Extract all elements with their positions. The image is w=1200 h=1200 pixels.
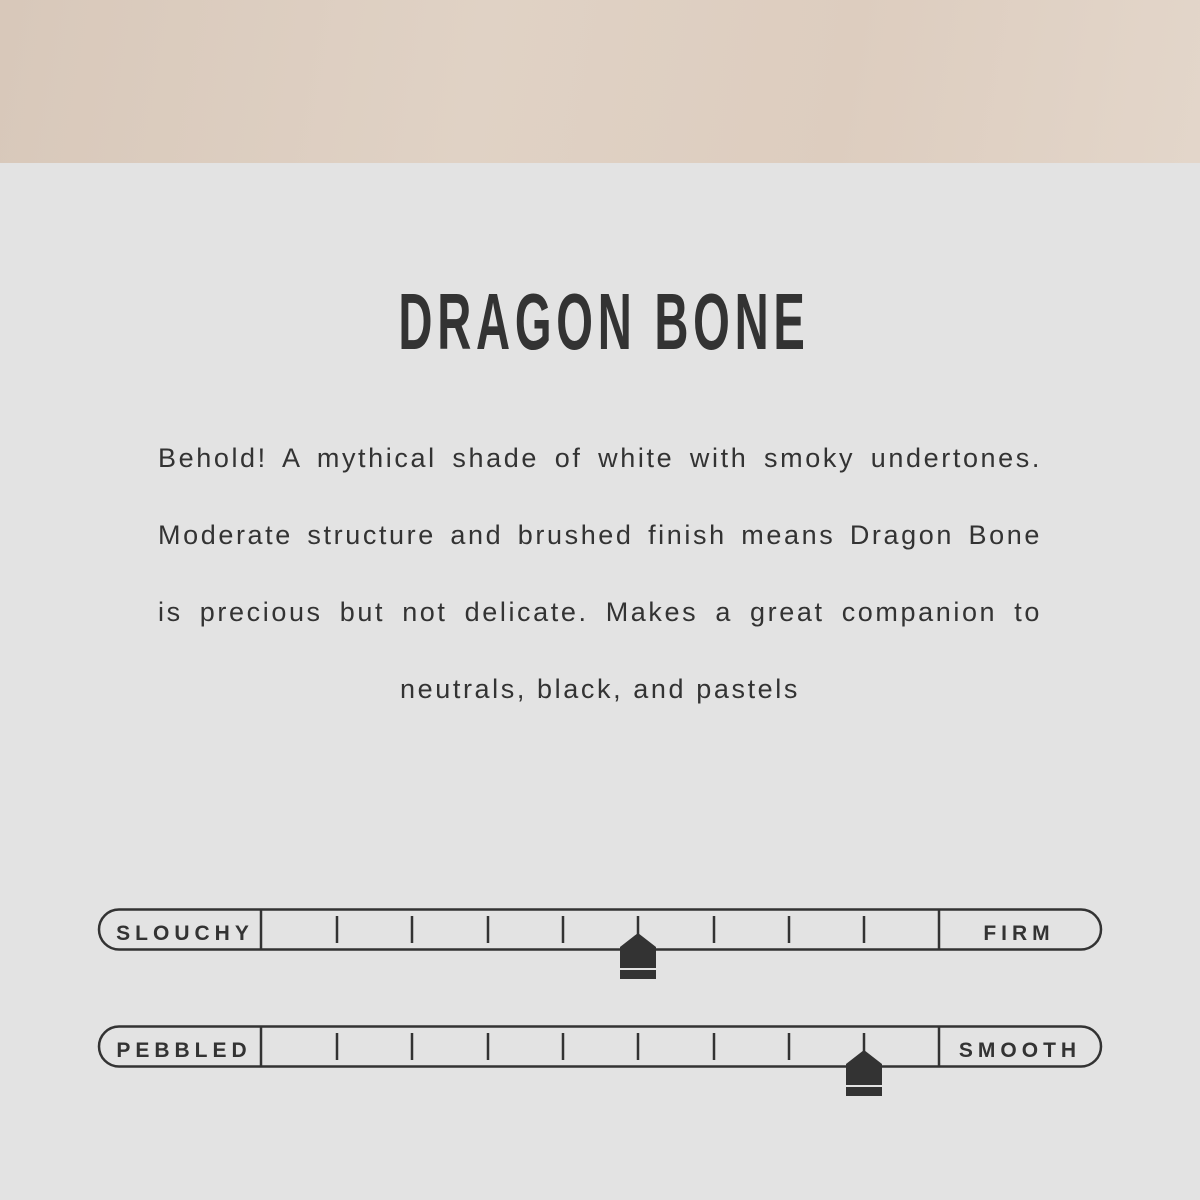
slider: pebbled to smooth: SMOOTH bbox=[959, 1039, 1081, 1062]
description text: is precious but not delicate. Makes a great companion to bbox=[158, 597, 1042, 627]
title: DRAGON BONE bbox=[398, 277, 810, 366]
slider: slouchy to firm: SLOUCHY bbox=[116, 922, 254, 945]
header leather texture band bbox=[0, 0, 1200, 163]
slider: pebbled to smooth: PEBBLED bbox=[116, 1039, 252, 1062]
slider: slouchy to firm bbox=[99, 909, 1101, 979]
description text bbox=[158, 443, 1042, 704]
marker bbox=[620, 933, 656, 979]
description text: Behold! A mythical shade of white with smoky undertones. bbox=[158, 443, 1042, 473]
slider: pebbled to smooth bbox=[99, 1026, 1101, 1096]
marker bbox=[846, 1050, 882, 1096]
slider: slouchy to firm: FIRM bbox=[983, 922, 1055, 945]
description text: neutrals, black, and pastels bbox=[400, 674, 800, 704]
description text: Moderate structure and brushed finish means Dragon Bone bbox=[158, 520, 1042, 550]
